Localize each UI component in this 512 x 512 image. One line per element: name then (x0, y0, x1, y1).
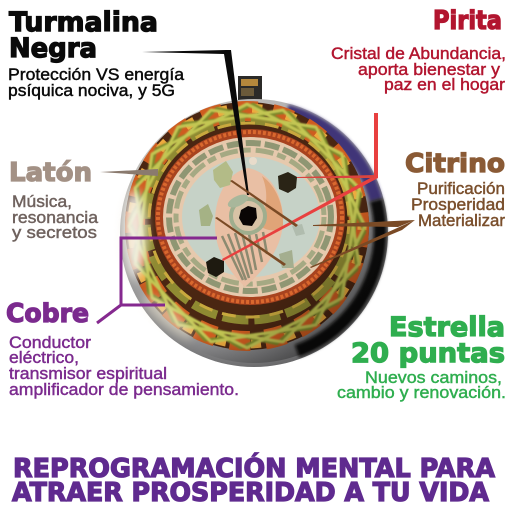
heading: Negra (9, 33, 97, 64)
description: Conductor (9, 333, 91, 352)
description: Nuevos caminos, (365, 368, 502, 387)
heading (351, 312, 505, 369)
label: pirita (331, 6, 506, 94)
ring glyph outer band (169, 143, 331, 291)
connector: turmalina black line (142, 50, 249, 195)
connector: pirita red line (222, 113, 378, 261)
description: Prosperidad (411, 195, 505, 214)
description: resonancia (12, 208, 99, 227)
central black tourmaline (239, 206, 257, 226)
description: paz en el hogar (384, 75, 505, 94)
title banner: REPROGRAMACIÓN MENTAL PARA (13, 452, 495, 484)
dome vignette (120, 99, 388, 367)
pyrite stone top right (278, 172, 297, 193)
description: Materializar (418, 211, 505, 230)
inner tangential threads (146, 120, 352, 320)
connector: cobre purple line (97, 238, 217, 323)
almond central copper shape (215, 168, 283, 287)
description (12, 192, 99, 242)
label: laton (9, 158, 99, 242)
thread wedges orange (135, 111, 359, 341)
description (8, 65, 185, 100)
heading: Cobre (6, 299, 89, 329)
description: aporta bienestar y (358, 60, 501, 79)
description (411, 179, 505, 230)
heading: Estrella (389, 312, 505, 343)
description: transmisor espiritual (9, 364, 167, 383)
description (9, 333, 239, 399)
description: y secretos (12, 223, 97, 242)
thread base (125, 102, 369, 350)
white sheen lower left (138, 291, 198, 345)
title banner: ATRAER PROSPERIDAD A TU VIDA (12, 478, 489, 508)
pendant illustration (120, 76, 388, 367)
citrine chip left (199, 204, 213, 226)
description (331, 44, 506, 94)
heading: Turmalina (9, 7, 158, 38)
label: cobre (6, 299, 239, 399)
heading: Pirita (433, 6, 502, 36)
heading: Latón (9, 158, 92, 188)
description: cambio y renovación. (337, 383, 506, 402)
title banner (12, 452, 495, 508)
brass ring plate (163, 137, 337, 297)
heading: Citrino (405, 149, 505, 179)
heading: 20 puntas (351, 338, 505, 369)
white sheen left (122, 190, 146, 280)
thread wedges gold (132, 108, 362, 344)
dark blue reflection (287, 111, 376, 200)
label: estrella 20 puntas (337, 312, 506, 402)
lower right shading (124, 103, 384, 363)
copper coil ring (155, 129, 345, 305)
connector: laton line (100, 169, 158, 176)
citrine chip right (292, 224, 305, 236)
description: Protección VS energía (8, 65, 185, 84)
label: citrino (405, 149, 505, 230)
description: psíquica nociva, y 5G (8, 81, 175, 100)
almond feather lines (222, 232, 267, 280)
twenty point star threads (123, 98, 371, 354)
almond orange shading (260, 176, 283, 230)
icon: pendant bail (238, 76, 262, 104)
description: Cristal de Abundancia, (331, 44, 506, 63)
small top circle (249, 157, 257, 165)
description: amplificador de pensamiento. (9, 380, 239, 399)
pyrite stone lower left (206, 257, 224, 277)
green leaf top of almond (226, 192, 250, 210)
description: Purificación (417, 179, 505, 198)
description: eléctrico, (9, 348, 79, 367)
citrine chip lower right (279, 250, 294, 268)
black lower right (297, 200, 380, 351)
heading (9, 7, 158, 64)
citrine chip top left (213, 161, 233, 188)
description: Música, (12, 192, 72, 211)
center green ring (231, 199, 265, 233)
pendant rim (120, 99, 388, 367)
label: turmalina negra (8, 7, 185, 100)
ring glyph inner band (176, 150, 324, 284)
connector: citrino brown lines (215, 180, 415, 268)
inner disc (182, 157, 320, 277)
description (337, 368, 506, 402)
